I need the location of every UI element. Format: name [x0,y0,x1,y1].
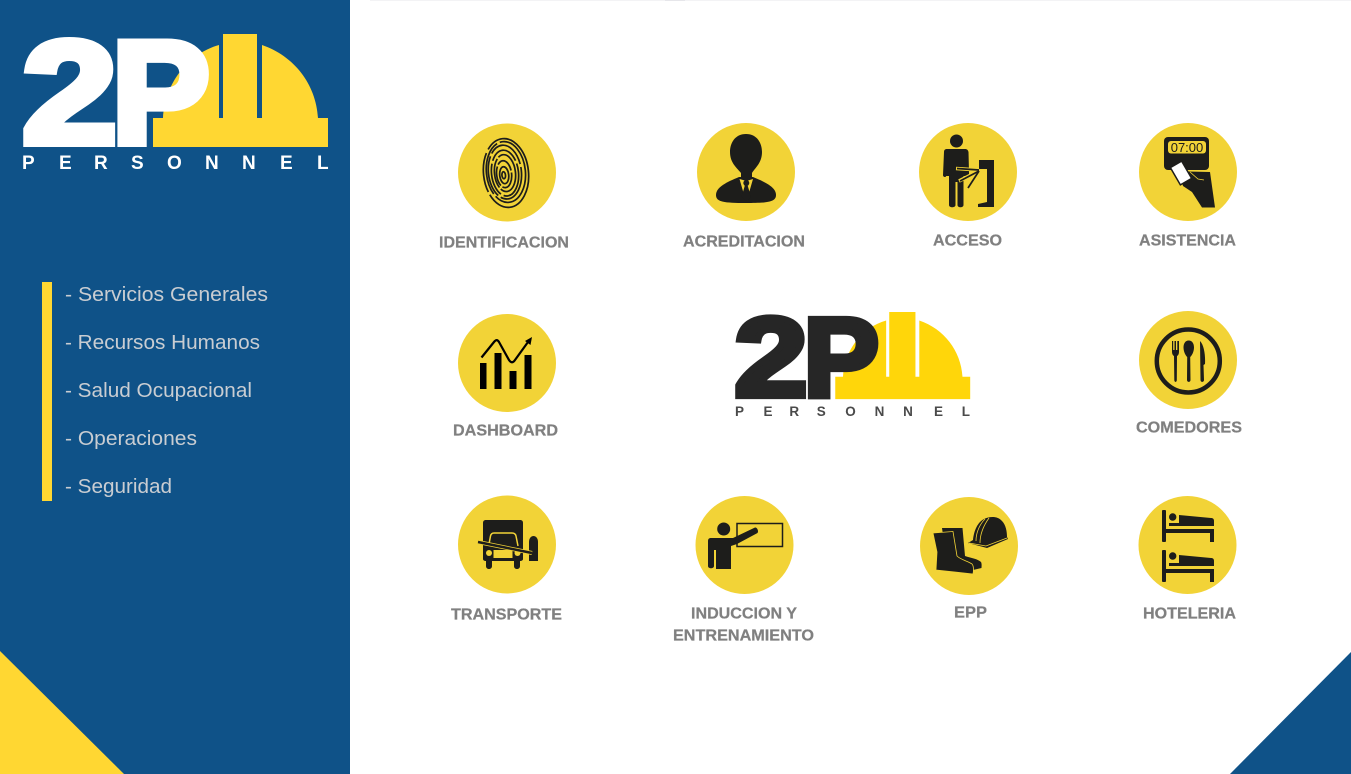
item: induccion y entrenamiento: INDUCCION Y [691,605,797,622]
sidebar logo: 2P Personnel [22,11,329,174]
item: comedores: COMEDORES [1136,419,1242,436]
item: acreditacion [683,123,805,250]
central logo: 2P Personnel [734,294,970,420]
central logo: 2P Personnel: 2 [734,294,808,420]
menu list: - Operaciones [65,427,197,450]
blue corner triangle [1230,652,1351,774]
item: epp: EPP [954,604,987,621]
item: induccion y entrenamiento [673,496,814,644]
item: hoteleria: HOTELERIA [1143,605,1236,622]
central logo: 2P Personnel: P [803,294,879,420]
menu list [65,283,268,498]
sidebar logo: 2P Personnel: P [112,11,210,174]
item: transporte [451,496,562,623]
item: dashboard: DASHBOARD [453,422,558,439]
menu list: - Seguridad [65,475,172,498]
yellow corner triangle [0,651,124,774]
item: asistencia [1139,123,1237,249]
item: asistencia: ASISTENCIA [1139,232,1236,249]
item: hoteleria [1138,496,1236,622]
item: acceso: ACCESO [933,232,1002,249]
item: comedores [1136,311,1242,436]
menu list: - Recursos Humanos [65,331,260,354]
menu list: - Servicios Generales [65,283,268,306]
sidebar logo: 2P Personnel: PERSONNEL [22,153,329,174]
item: identificacion [439,124,569,251]
sidebar panel [0,0,350,774]
item: acceso [919,123,1017,249]
item: transporte: TRANSPORTE [451,606,562,623]
sidebar logo: 2P Personnel: 2 [22,11,117,174]
item: asistencia: 07:00 [1171,140,1203,155]
item: epp [920,497,1018,621]
item: induccion y entrenamiento: ENTRENAMIENTO [673,627,814,644]
item: identificacion: IDENTIFICACION [439,234,569,251]
menu list: - Salud Ocupacional [65,379,252,402]
item: dashboard [453,314,558,439]
yellow menu bar [42,282,52,501]
central logo: 2P Personnel: PERSONNEL [735,404,970,419]
item: acreditacion: ACREDITACION [683,233,805,250]
